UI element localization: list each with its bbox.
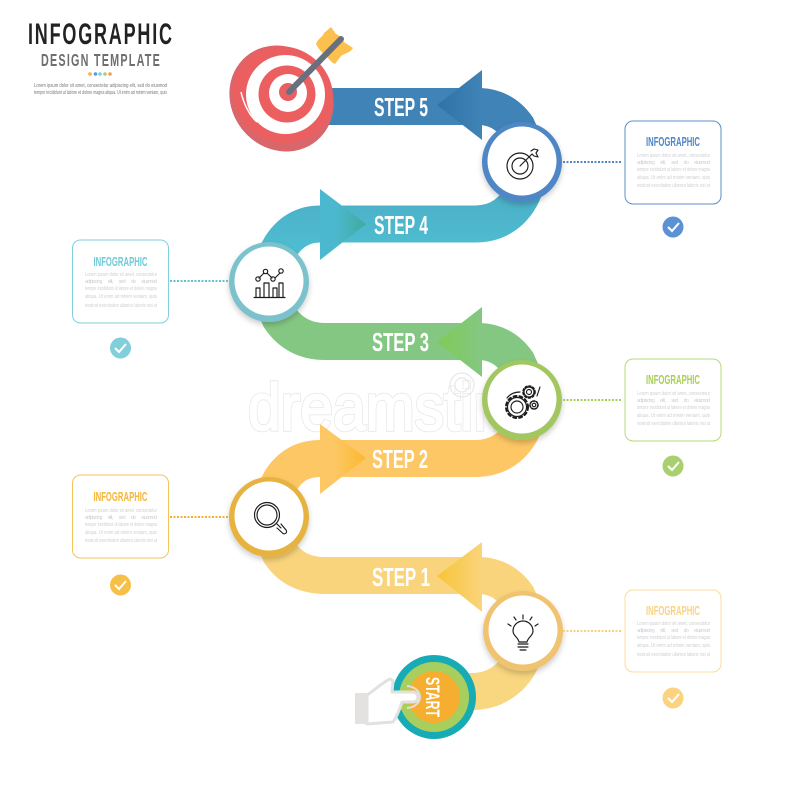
colour dots [88, 72, 112, 76]
step 2 label: STEP 2 [372, 444, 428, 474]
dart shaft [289, 39, 341, 92]
card text: nostrud exercitation ullamco laboris nisi ut [637, 183, 710, 189]
card text: tempor incididunt ut labore et dolore magna [85, 522, 157, 528]
node: step 1 [483, 591, 563, 671]
icon: magnifier [254, 502, 287, 534]
node: step 5 [482, 122, 562, 202]
intro text: tempor incididunt ut labore et dolore magna aliqua. Ut enim ad minim veniam, quis [34, 90, 167, 96]
card: step 2 [72, 475, 168, 558]
intro text: Lorem ipsum dolor sit amet, consectetur adipiscing elit, sed do eiusmod [34, 83, 167, 89]
title: INFOGRAPHIC [28, 19, 172, 51]
step 1 label: STEP 1 [372, 562, 430, 592]
node: step 2 [229, 477, 309, 557]
step 2 ribbon [272, 405, 527, 497]
card heading: INFOGRAPHIC [646, 603, 700, 618]
step 4 ribbon [272, 170, 527, 262]
step 3 arrow [437, 307, 482, 377]
connector: step 4 [170, 280, 229, 282]
card text [85, 508, 157, 544]
card text: aliqua. Ut enim ad minim veniam, quis [637, 413, 710, 419]
card text: aliqua. Ut enim ad minim veniam, quis [637, 175, 710, 181]
card text: nostrud exercitation ullamco laboris nisi ut [637, 421, 710, 427]
card text: Lorem ipsum dolor sit amet, consectetur [637, 621, 710, 627]
card text: adipiscing elit, sed do eiusmod [637, 398, 710, 404]
card text: adipiscing elit, sed do eiusmod [637, 628, 710, 634]
step 5 label: STEP 5 [374, 92, 428, 122]
watermark: dreamstime [248, 370, 555, 444]
card text [637, 391, 710, 427]
step 4 arrow [320, 189, 366, 260]
hand [355, 679, 420, 724]
card text: adipiscing elit, sed do eiusmod [637, 160, 710, 166]
start ribbon [435, 650, 525, 692]
card text: nostrud exercitation ullamco laboris nisi ut [85, 538, 157, 544]
node: step 4 [229, 242, 309, 322]
start label: START [421, 677, 442, 717]
check: step 2 [110, 574, 131, 596]
icon: light bulb [508, 615, 538, 650]
connector: step 1 [563, 630, 622, 632]
check: step 1 [662, 688, 684, 708]
check: step 3 [662, 456, 684, 476]
card text: tempor incididunt ut labore et dolore magna [637, 405, 710, 411]
card text: tempor incididunt ut labore et dolore magna [637, 635, 710, 641]
card text: aliqua. Ut enim ad minim veniam, quis [637, 643, 710, 649]
step 5 arrow [437, 70, 482, 140]
target icon [208, 24, 355, 173]
card heading: INFOGRAPHIC [94, 254, 148, 269]
card text: Lorem ipsum dolor sit amet, consectetur [637, 153, 710, 159]
card text: adipiscing elit, sed do eiusmod [85, 279, 157, 285]
subtitle: DESIGN TEMPLATE [41, 51, 160, 71]
card text: nostrud exercitation ullamco laboris nisi ut [85, 303, 157, 309]
card text: tempor incididunt ut labore et dolore magna [637, 167, 710, 173]
connector: step 3 [563, 399, 622, 401]
card: step 3 [625, 359, 721, 441]
card heading: INFOGRAPHIC [94, 489, 148, 504]
step 1 ribbon [272, 535, 525, 615]
card text: adipiscing elit, sed do eiusmod [85, 515, 157, 521]
card: step 1 [625, 590, 721, 672]
title block [28, 19, 172, 96]
step 3 ribbon [272, 300, 525, 380]
step 4 label: STEP 4 [374, 210, 428, 240]
icon: chart [254, 269, 285, 298]
check: step 5 [662, 216, 684, 238]
card text: aliqua. Ut enim ad minim veniam, quis [85, 294, 157, 300]
step 1 arrow [437, 542, 482, 612]
card text: tempor incididunt ut labore et dolore magna [85, 286, 157, 292]
card text: Lorem ipsum dolor sit amet, consectetur [85, 508, 157, 514]
card text [637, 621, 710, 658]
step 3 label: STEP 3 [372, 327, 429, 357]
card text: nostrud exercitation ullamco laboris nisi ut [637, 652, 710, 658]
check: step 4 [110, 338, 131, 358]
step 2 arrow [320, 424, 366, 494]
card: step 4 [72, 240, 168, 323]
card heading: INFOGRAPHIC [646, 134, 700, 149]
node: step 3 [482, 360, 562, 440]
card text [85, 272, 157, 309]
connector: step 5 [563, 161, 622, 163]
intro text [34, 83, 167, 96]
card text: aliqua. Ut enim ad minim veniam, quis [85, 530, 157, 536]
icon: gears [506, 386, 540, 418]
icon: target [507, 149, 538, 179]
card text: Lorem ipsum dolor sit amet, consectetur [637, 391, 710, 397]
card text [637, 153, 710, 189]
watermark: dreamstime [248, 370, 555, 444]
card: step 5 [625, 121, 721, 204]
start button [355, 655, 476, 739]
connector: step 2 [170, 516, 229, 518]
card heading: INFOGRAPHIC [646, 372, 700, 387]
dart fletching [316, 27, 353, 64]
step 5 ribbon [320, 70, 525, 145]
card text: Lorem ipsum dolor sit amet, consectetur [85, 272, 157, 278]
